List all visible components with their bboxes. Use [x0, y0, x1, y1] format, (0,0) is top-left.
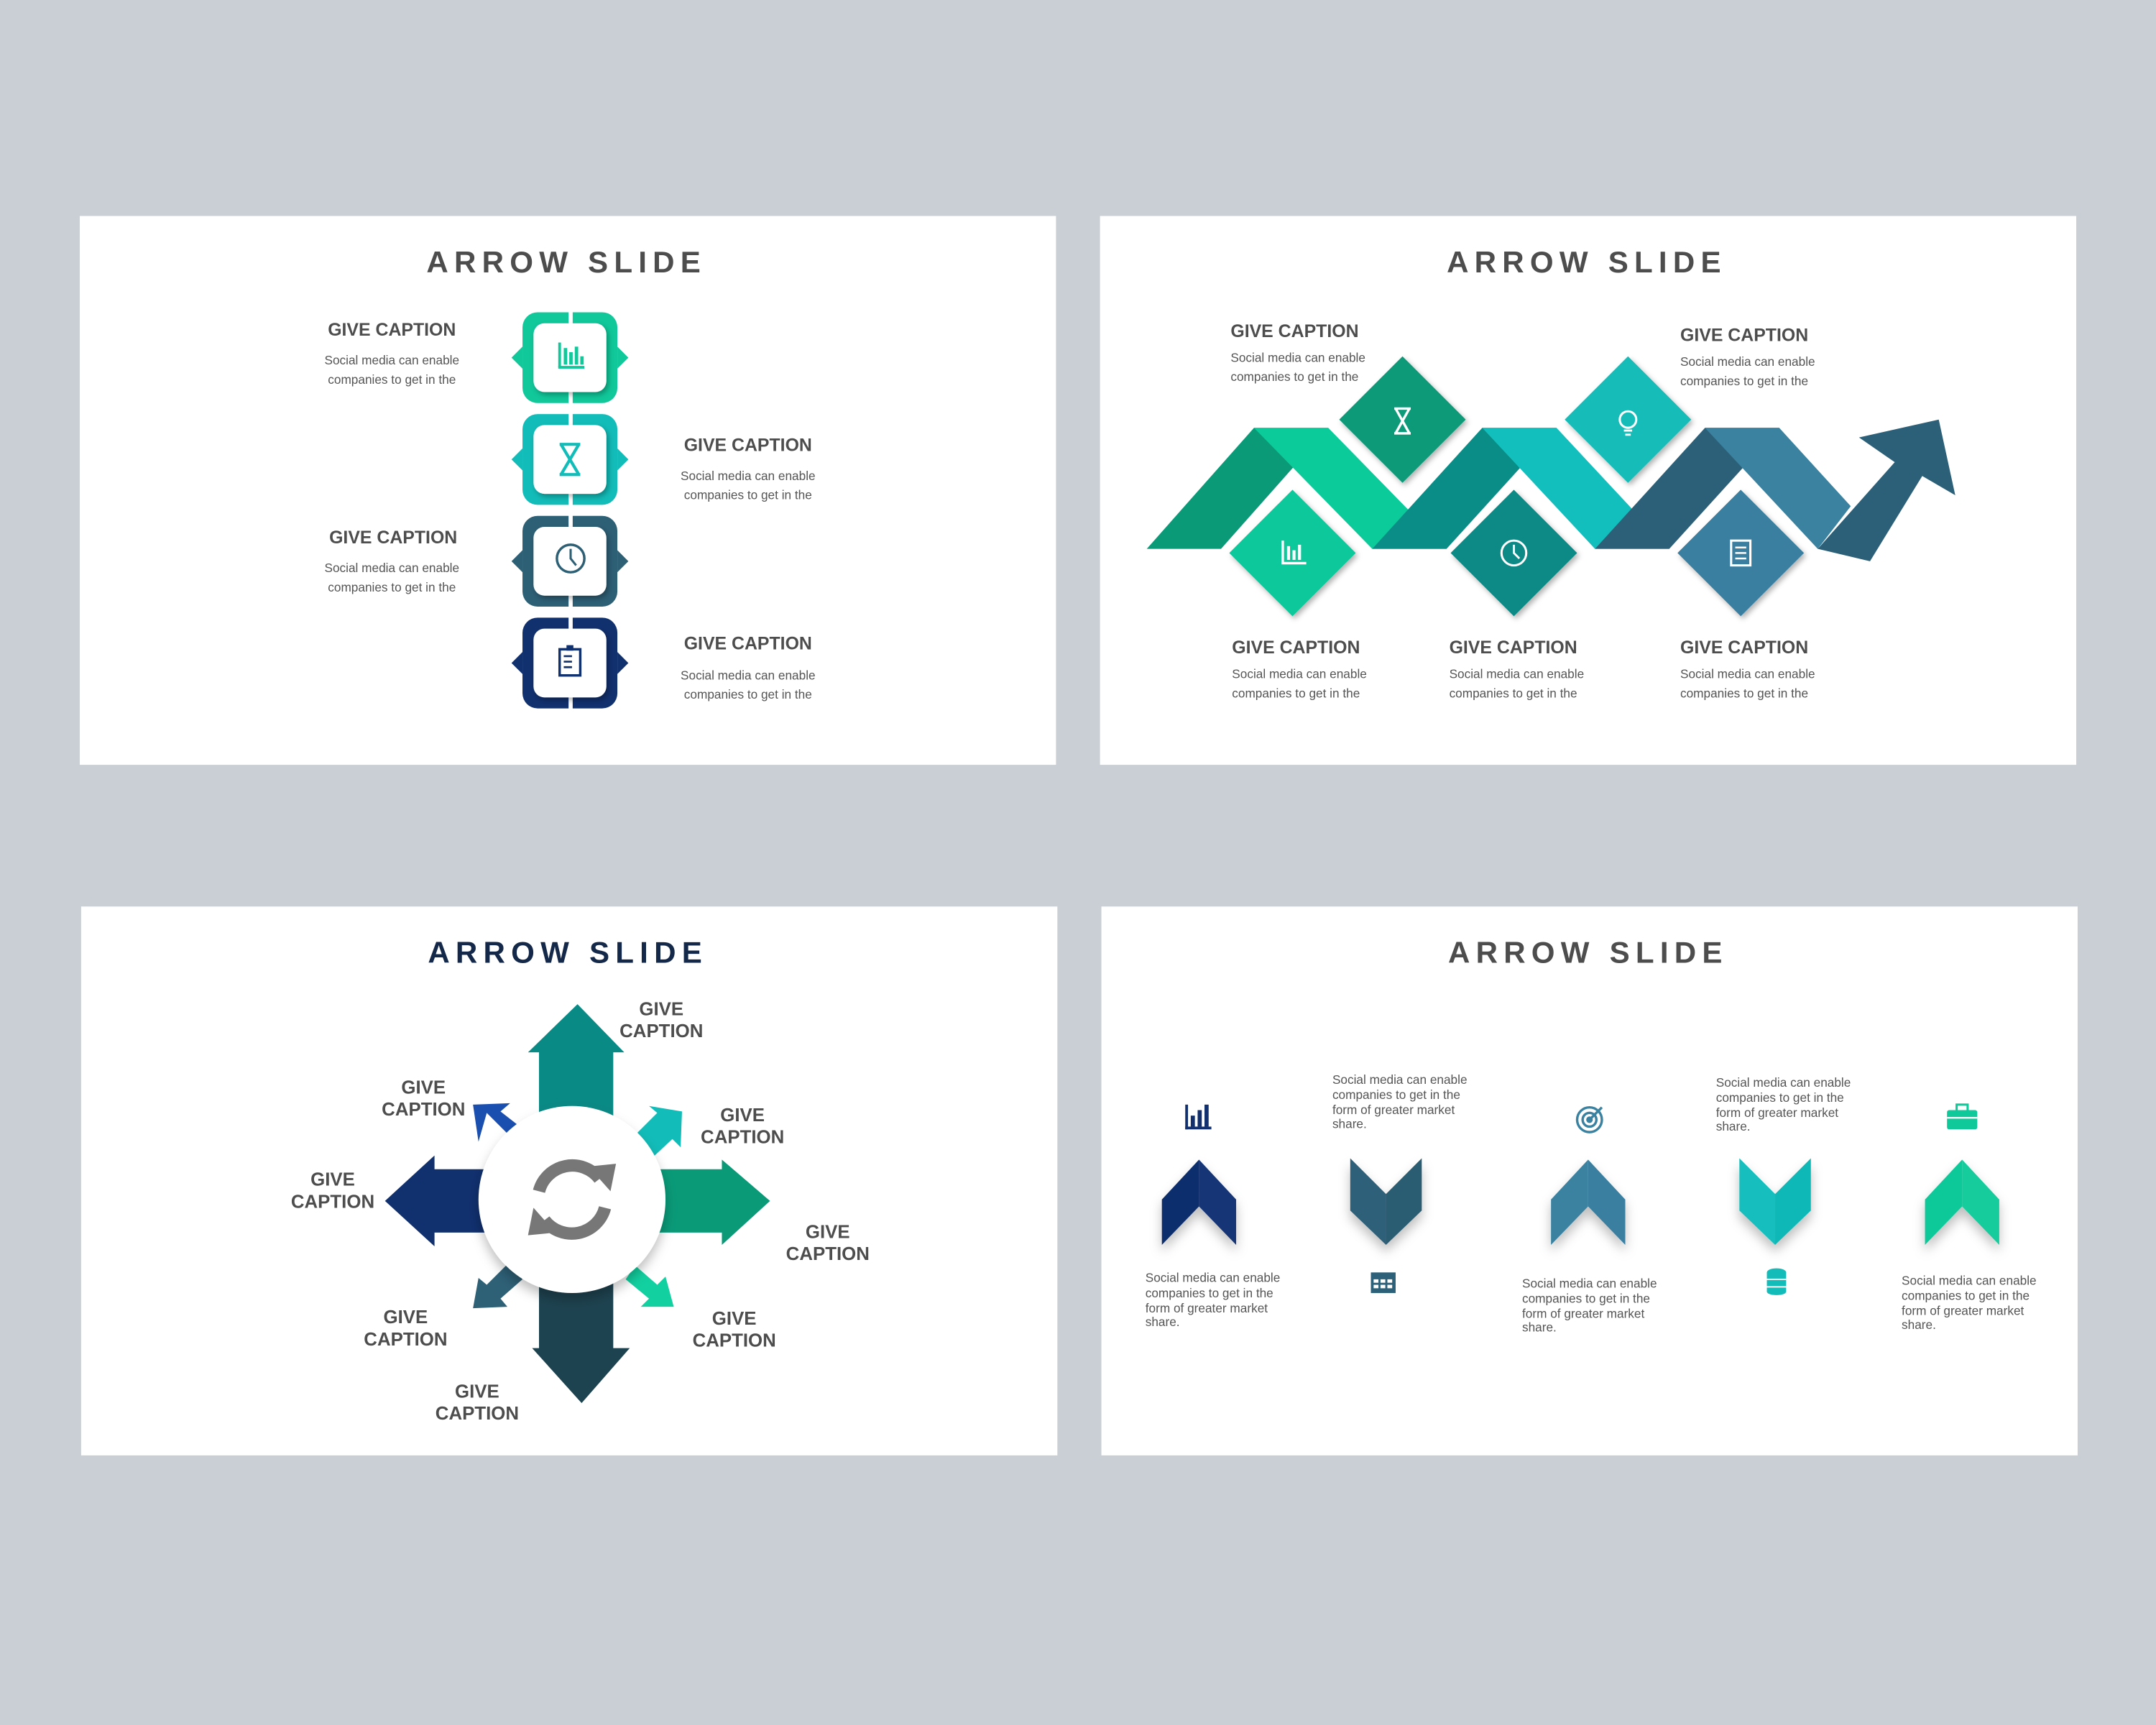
panel: radial arrows slide: GIVE [310, 1170, 355, 1190]
arrow NW [473, 1103, 525, 1142]
text block 3 [1522, 1276, 1657, 1335]
panel: radial arrows slide: CAPTION [693, 1331, 776, 1351]
panel: radial arrows slide [81, 906, 1057, 1455]
diamond: hourglass [1340, 356, 1466, 483]
text block 1 [1146, 1271, 1280, 1329]
caption bottom 2 [1450, 638, 1584, 700]
text block 3: Social media can enable [1522, 1276, 1657, 1290]
caption bottom 3: Social media can enable [1680, 667, 1815, 681]
chevron 2 down [1350, 1158, 1422, 1245]
caption bottom 1 [1232, 638, 1367, 700]
icon: calendar [1371, 1272, 1396, 1293]
diamond: chart [1229, 489, 1355, 616]
panel: radial arrows slide: CAPTION [436, 1404, 519, 1424]
text block 5: share. [1902, 1317, 1936, 1332]
step 1 box (chart) [512, 310, 628, 406]
icon: briefcase [1947, 1105, 1977, 1129]
text block 2: Social media can enable [1332, 1072, 1468, 1087]
arrow SE [626, 1266, 674, 1307]
panel: radial arrows slide: GIVE [401, 1078, 446, 1098]
caption bottom 1: companies to get in the [1232, 686, 1360, 700]
icon: bar chart [1185, 1105, 1212, 1129]
caption 1: Social media can enable [324, 353, 459, 367]
diamond: clipboard [1677, 489, 1804, 616]
title: ARROW SLIDE [1447, 245, 1727, 279]
text block 1: share. [1146, 1315, 1180, 1329]
title: ARROW SLIDE [1448, 936, 1728, 970]
arrow up [528, 1004, 625, 1117]
panel: radial arrows slide: CAPTION [291, 1192, 374, 1212]
text block 1: Social media can enable [1146, 1271, 1280, 1285]
chevron 4 down [1739, 1158, 1811, 1245]
text block 2: form of greater market [1332, 1103, 1455, 1117]
caption bottom 3: companies to get in the [1680, 686, 1808, 700]
diamond: clock [1450, 489, 1577, 616]
caption top-right [1680, 326, 1815, 388]
caption 3: GIVE CAPTION [329, 528, 457, 548]
text block 5 [1902, 1274, 2037, 1332]
caption 2 [681, 436, 816, 502]
panel: radial arrows slide: GIVE [712, 1309, 757, 1329]
chevron 1 up [1162, 1159, 1236, 1245]
caption top-left: Social media can enable [1230, 350, 1365, 364]
caption 4: companies to get in the [684, 687, 812, 702]
text block 4 [1716, 1075, 1851, 1133]
icon: target [1577, 1108, 1602, 1132]
text block 4: companies to get in the [1716, 1090, 1844, 1105]
caption 1: GIVE CAPTION [328, 320, 456, 340]
step 4 box (clipboard) [512, 615, 628, 711]
panel: radial arrows slide: CAPTION [364, 1330, 448, 1350]
caption 1: companies to get in the [328, 372, 456, 387]
text block 3: form of greater market [1522, 1306, 1645, 1320]
text block 4: Social media can enable [1716, 1075, 1851, 1090]
caption bottom 2: GIVE CAPTION [1450, 638, 1577, 658]
icon: database [1767, 1269, 1786, 1295]
arrow left [385, 1156, 495, 1246]
title: ARROW SLIDE [426, 245, 706, 279]
zigzag arrow [1147, 420, 1955, 561]
panel: zigzag arrow slide [1100, 216, 2076, 765]
caption 4: GIVE CAPTION [684, 633, 812, 653]
panel: radial arrows slide: GIVE [806, 1222, 850, 1242]
caption 3: Social media can enable [324, 561, 459, 575]
caption top-left [1230, 321, 1365, 384]
caption 4: Social media can enable [681, 668, 816, 682]
caption top-left: companies to get in the [1230, 369, 1358, 384]
text block 5: Social media can enable [1902, 1274, 2037, 1288]
panel: radial arrows slide: GIVE [720, 1105, 765, 1126]
panel: radial arrows slide: CAPTION [701, 1127, 784, 1147]
caption bottom 1: Social media can enable [1232, 667, 1367, 681]
captions: GIVE [639, 999, 683, 1019]
text block 5: form of greater market [1902, 1304, 2024, 1318]
panel: vertical steps slide [80, 216, 1056, 765]
chevron 5 up [1925, 1159, 1999, 1245]
caption 2: companies to get in the [684, 488, 812, 502]
caption 2: GIVE CAPTION [684, 436, 812, 456]
caption 1 [324, 320, 459, 387]
step 2 box (hourglass) [512, 411, 628, 507]
text block 2: companies to get in the [1332, 1087, 1460, 1102]
text block 4: share. [1716, 1119, 1751, 1133]
panel: radial arrows slide: CAPTION [382, 1100, 465, 1120]
caption bottom 2: Social media can enable [1450, 667, 1584, 681]
caption 3 [324, 528, 459, 594]
text block 4: form of greater market [1716, 1105, 1838, 1120]
caption top-right: GIVE CAPTION [1680, 326, 1808, 346]
caption bottom 3 [1680, 638, 1815, 700]
diamond: bulb [1565, 356, 1691, 483]
caption 3: companies to get in the [328, 580, 456, 594]
caption bottom 3: GIVE CAPTION [1680, 638, 1808, 658]
center circle with refresh icon [479, 1106, 665, 1293]
caption top-left: GIVE CAPTION [1230, 321, 1359, 341]
caption top-right: companies to get in the [1680, 374, 1808, 388]
arrow right [649, 1159, 770, 1245]
caption bottom 2: companies to get in the [1450, 686, 1577, 700]
caption 2: Social media can enable [681, 469, 816, 483]
caption top-right: Social media can enable [1680, 354, 1815, 369]
text block 2: share. [1332, 1116, 1367, 1131]
panel: radial arrows slide: GIVE [384, 1307, 428, 1328]
title: ARROW SLIDE [428, 936, 708, 970]
arrow down [532, 1279, 630, 1403]
panel: radial arrows slide: CAPTION [786, 1244, 870, 1264]
arrow NE [635, 1106, 682, 1158]
text block 5: companies to get in the [1902, 1289, 2030, 1303]
chevron 3 up [1551, 1159, 1625, 1245]
text block 1: companies to get in the [1146, 1286, 1273, 1300]
text block 3: companies to get in the [1522, 1291, 1650, 1305]
text block 2 [1332, 1072, 1468, 1131]
caption bottom 1: GIVE CAPTION [1232, 638, 1360, 658]
arrow SW [473, 1263, 522, 1308]
step 3 box (clock) [512, 513, 628, 610]
panel: chevron slide [1102, 906, 2078, 1455]
text block 3: share. [1522, 1320, 1557, 1335]
captions: CAPTION [619, 1021, 703, 1041]
caption 4 [681, 633, 816, 702]
captions [619, 999, 703, 1041]
panel: radial arrows slide: GIVE [455, 1381, 499, 1402]
text block 1: form of greater market [1146, 1301, 1268, 1315]
